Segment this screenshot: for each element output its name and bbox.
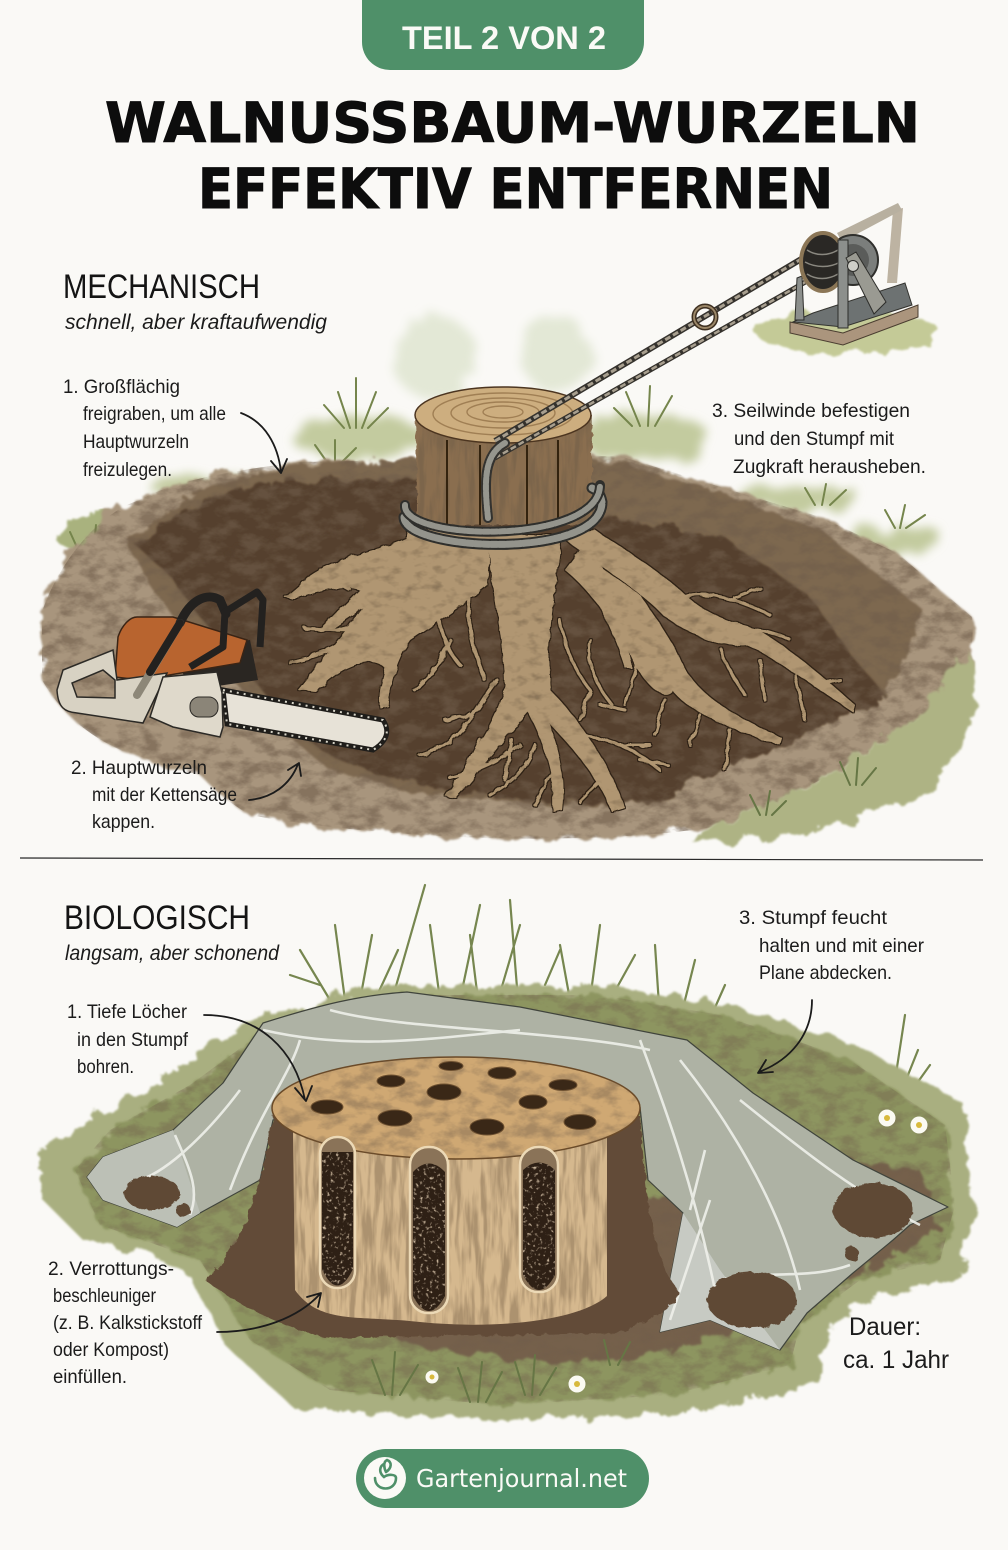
step 3: winch: 3. Seilwinde befestigen (712, 400, 910, 422)
illustration: biological stump decay (40, 885, 973, 1420)
step 1: drill holes: 1. Tiefe Löcher (67, 1001, 187, 1023)
heading: mechanical (63, 268, 327, 334)
step 2: accelerator: oder Kompost) (53, 1339, 169, 1361)
front handle (180, 597, 226, 623)
tufts of grass (70, 378, 925, 565)
illustration: mechanical root removal (42, 203, 973, 841)
stump flared roots (205, 1115, 679, 1338)
lower right grass (690, 650, 973, 841)
drilled holes on top (311, 1062, 596, 1135)
step 3: tarp (739, 907, 924, 984)
step 2: accelerator: 2. Verrottungs- (48, 1258, 174, 1280)
duration note: Dauer: (849, 1313, 921, 1341)
chain and bar (223, 690, 387, 750)
winch ropes with ring (495, 255, 830, 458)
tall grass behind (290, 885, 930, 1100)
icon: brand logo (364, 1457, 406, 1499)
title (105, 91, 920, 221)
step 2: chainsaw: 2. Hauptwurzeln (71, 757, 207, 779)
step 2: chainsaw: mit der Kettensäge (92, 784, 237, 806)
dark shaded left wall (135, 478, 420, 580)
badge: part indicator (362, 0, 644, 70)
tree stump (415, 387, 592, 525)
title: WALNUSSBAUM-WURZELN (105, 91, 920, 155)
step 3: winch: und den Stumpf mit (734, 428, 895, 450)
compost-filled slots (320, 1137, 558, 1313)
step 1: dig out: Hauptwurzeln (83, 431, 189, 453)
left grass (56, 513, 140, 557)
dark engine (173, 640, 258, 690)
step 1: dig out (63, 376, 226, 481)
step 3: tarp: Plane abdecken. (759, 962, 892, 984)
step 2: accelerator: einfüllen. (53, 1366, 127, 1388)
heading: mechanical: MECHANISCH (63, 268, 260, 306)
step 1: drill holes (67, 1001, 189, 1078)
badge: part indicator: TEIL 2 VON 2 (402, 20, 606, 56)
heading: biological (64, 899, 280, 965)
soil surrounding the pit (42, 456, 973, 839)
step 2: accelerator: (z. B. Kalkstickstoff (53, 1312, 203, 1334)
step 1: drill holes: bohren. (77, 1056, 134, 1078)
footer badge: brand: Gartenjournal.net (416, 1464, 627, 1493)
arrow: accelerator (217, 1293, 321, 1332)
rope around stump (404, 443, 602, 544)
step 2: chainsaw: kappen. (92, 811, 155, 833)
heading: biological: BIOLOGISCH (64, 899, 250, 937)
orange cover (115, 617, 247, 680)
title: EFFEKTIV ENTFERNEN (198, 157, 833, 221)
duration note: ca. 1 Jahr (843, 1346, 949, 1374)
step 1: dig out: freigraben, um alle (83, 403, 226, 425)
grass rim behind the pit (150, 414, 945, 554)
large stump (272, 1057, 640, 1325)
step 3: winch (712, 400, 926, 478)
duration note (843, 1313, 949, 1374)
heading: mechanical: schnell, aber kraftaufwendig (65, 311, 327, 334)
step 2: accelerator (48, 1258, 203, 1388)
rear handle (57, 650, 167, 723)
background trees (393, 312, 589, 400)
icon: chainsaw (57, 592, 387, 750)
arrow: drill holes (204, 1015, 312, 1101)
hand guard (190, 592, 263, 667)
lower right grass tufts (750, 758, 876, 815)
bare soil around stump (225, 1160, 940, 1362)
step 2: chainsaw (71, 757, 237, 833)
step 1: drill holes: in den Stumpf (77, 1029, 189, 1051)
divider (20, 858, 983, 860)
flowers (426, 1110, 927, 1392)
soil mounds weighing tarp (124, 1176, 913, 1328)
grass ground (75, 995, 955, 1405)
arrow: step 2 (249, 763, 301, 800)
footer badge: brand (356, 1449, 649, 1508)
step 3: tarp: 3. Stumpf feucht (739, 907, 888, 929)
step 1: dig out: 1. Großflächig (63, 376, 180, 398)
step 3: winch: Zugkraft herausheben. (733, 456, 926, 478)
grass ground outer wash (40, 985, 973, 1420)
icon: winch (756, 203, 940, 354)
pit floor (170, 520, 887, 804)
ground speckle (75, 995, 955, 1405)
roots (284, 530, 855, 812)
heading: biological: langsam, aber schonend (65, 942, 280, 965)
front grass tufts (372, 1340, 630, 1402)
soil speckle (42, 456, 973, 839)
arrow: tarp (758, 1000, 812, 1073)
step 3: tarp: halten und mit einer (759, 935, 924, 957)
pit wall (128, 459, 920, 806)
clutch housing (150, 672, 223, 737)
step 1: dig out: freizulegen. (83, 459, 172, 481)
plastic tarp (87, 992, 948, 1350)
step 2: accelerator: beschleuniger (53, 1285, 156, 1307)
arrow: step 1 (241, 413, 287, 473)
